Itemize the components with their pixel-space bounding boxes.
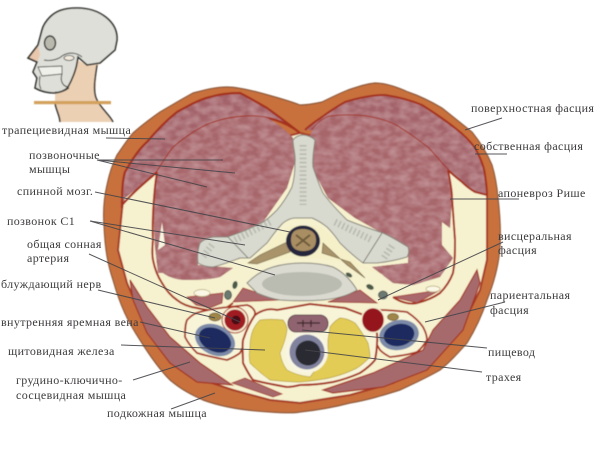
- label: internal jugular vein: внутренняя яремная вена: [1, 315, 139, 329]
- label: platysma: подкожная мышца: [107, 406, 207, 420]
- label: esophagus: пищевод: [488, 345, 535, 359]
- spinal cord: [286, 226, 320, 256]
- label: proper fascia: собственная фасция: [474, 139, 583, 153]
- strap muscle strip left: [232, 378, 282, 397]
- label: common carotid artery: общая сонная: [27, 237, 102, 251]
- icon: head with skull and section level: [28, 8, 117, 122]
- label: spinal muscles: мышцы: [29, 162, 70, 176]
- trapezius left fascia: [122, 93, 300, 208]
- label: parietal fascia: париентальная: [490, 288, 570, 302]
- subcutaneous fat: [118, 133, 487, 403]
- carotid sheath left: [185, 305, 255, 360]
- label: vagus nerve: блуждающий нерв: [1, 277, 102, 291]
- label: thyroid gland: щитовидная железа: [8, 344, 115, 358]
- label: sternocleidomastoid muscle: грудино-ключично-: [16, 373, 123, 387]
- label: visceral fascia: висцеральная: [498, 229, 572, 243]
- sternocleidomastoid right: [323, 270, 480, 393]
- thyroid gland: [249, 318, 370, 382]
- trapezius right: [305, 95, 487, 195]
- skin and superficial fascia: [104, 83, 500, 413]
- nerve roots: [248, 242, 365, 278]
- panel: neck cross-section: [104, 83, 500, 413]
- esophagus: [288, 315, 328, 332]
- deep spinal muscles right: [308, 115, 453, 285]
- deep spinal muscles left: [153, 116, 295, 280]
- right common carotid artery: [362, 308, 384, 332]
- label: spinal muscles: позвоночные: [29, 148, 100, 162]
- label: superficial fascia: поверхностная фасция: [471, 101, 594, 115]
- left internal jugular vein: [190, 318, 240, 362]
- label: common carotid artery: артерия: [27, 251, 69, 265]
- label: Richet aponeurosis: апоневроз Рише: [498, 186, 586, 200]
- left common carotid artery: [222, 307, 248, 333]
- label: sternocleidomastoid muscle: сосцевидная мышца: [16, 388, 127, 402]
- label: trapezius: трапециевидная мышца: [2, 123, 131, 137]
- label: visceral fascia: фасция: [498, 243, 537, 257]
- trapezius left: [122, 93, 300, 208]
- trapezius right fascia: [305, 95, 487, 195]
- labels: left column: [1, 123, 207, 420]
- carotid sheath right: [372, 310, 427, 357]
- fat sliver left: [158, 222, 165, 250]
- sternocleidomastoid left: [130, 280, 232, 385]
- deep fascia lines: [152, 170, 455, 310]
- label: vertebra C1: позвонок С1: [7, 214, 75, 228]
- small prevertebral muscles: [187, 288, 440, 308]
- right internal jugular vein: [376, 316, 422, 354]
- vagus nerves: [209, 313, 221, 321]
- visceral compartment: [243, 304, 377, 387]
- labels: right column: [471, 101, 594, 384]
- vertebral body C1: [247, 263, 357, 301]
- leader lines: [89, 118, 519, 409]
- fat around spinal canal: [248, 226, 384, 276]
- trachea: [286, 331, 328, 373]
- label: spinal cord: спинной мозг.: [17, 184, 93, 198]
- label: parietal fascia: фасция: [490, 303, 529, 317]
- vertebral vessels and fat detail: [194, 290, 210, 296]
- vertebra C1 arch: [198, 135, 409, 267]
- label: trachea: трахея: [486, 370, 522, 384]
